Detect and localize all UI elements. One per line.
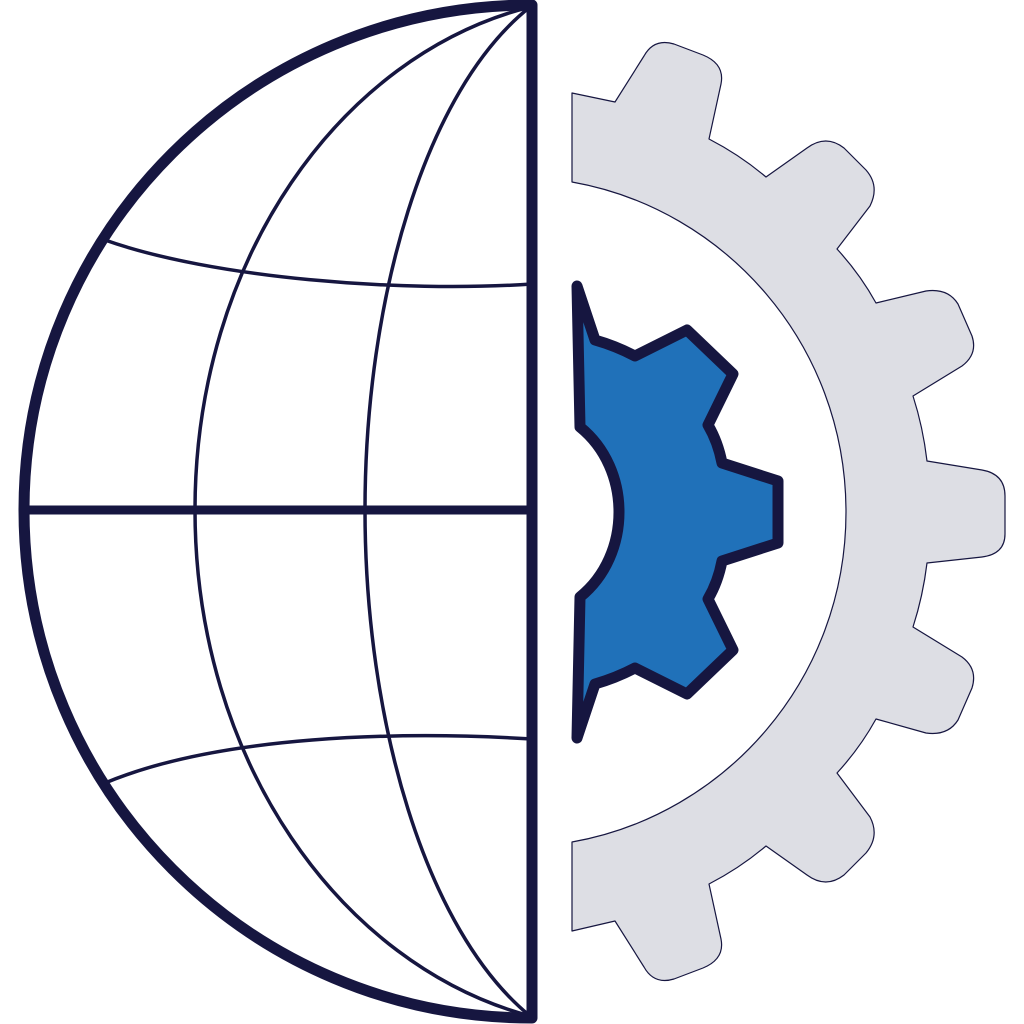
- globe equator: [24, 506, 532, 514]
- globe latitude lines: [105, 240, 532, 783]
- icon: large grey gear: [572, 42, 1005, 980]
- globe outline: [24, 5, 532, 1018]
- icon: small blue gear: [577, 286, 778, 738]
- globe meridians: [195, 7, 530, 1016]
- icon: half globe: [24, 5, 532, 1018]
